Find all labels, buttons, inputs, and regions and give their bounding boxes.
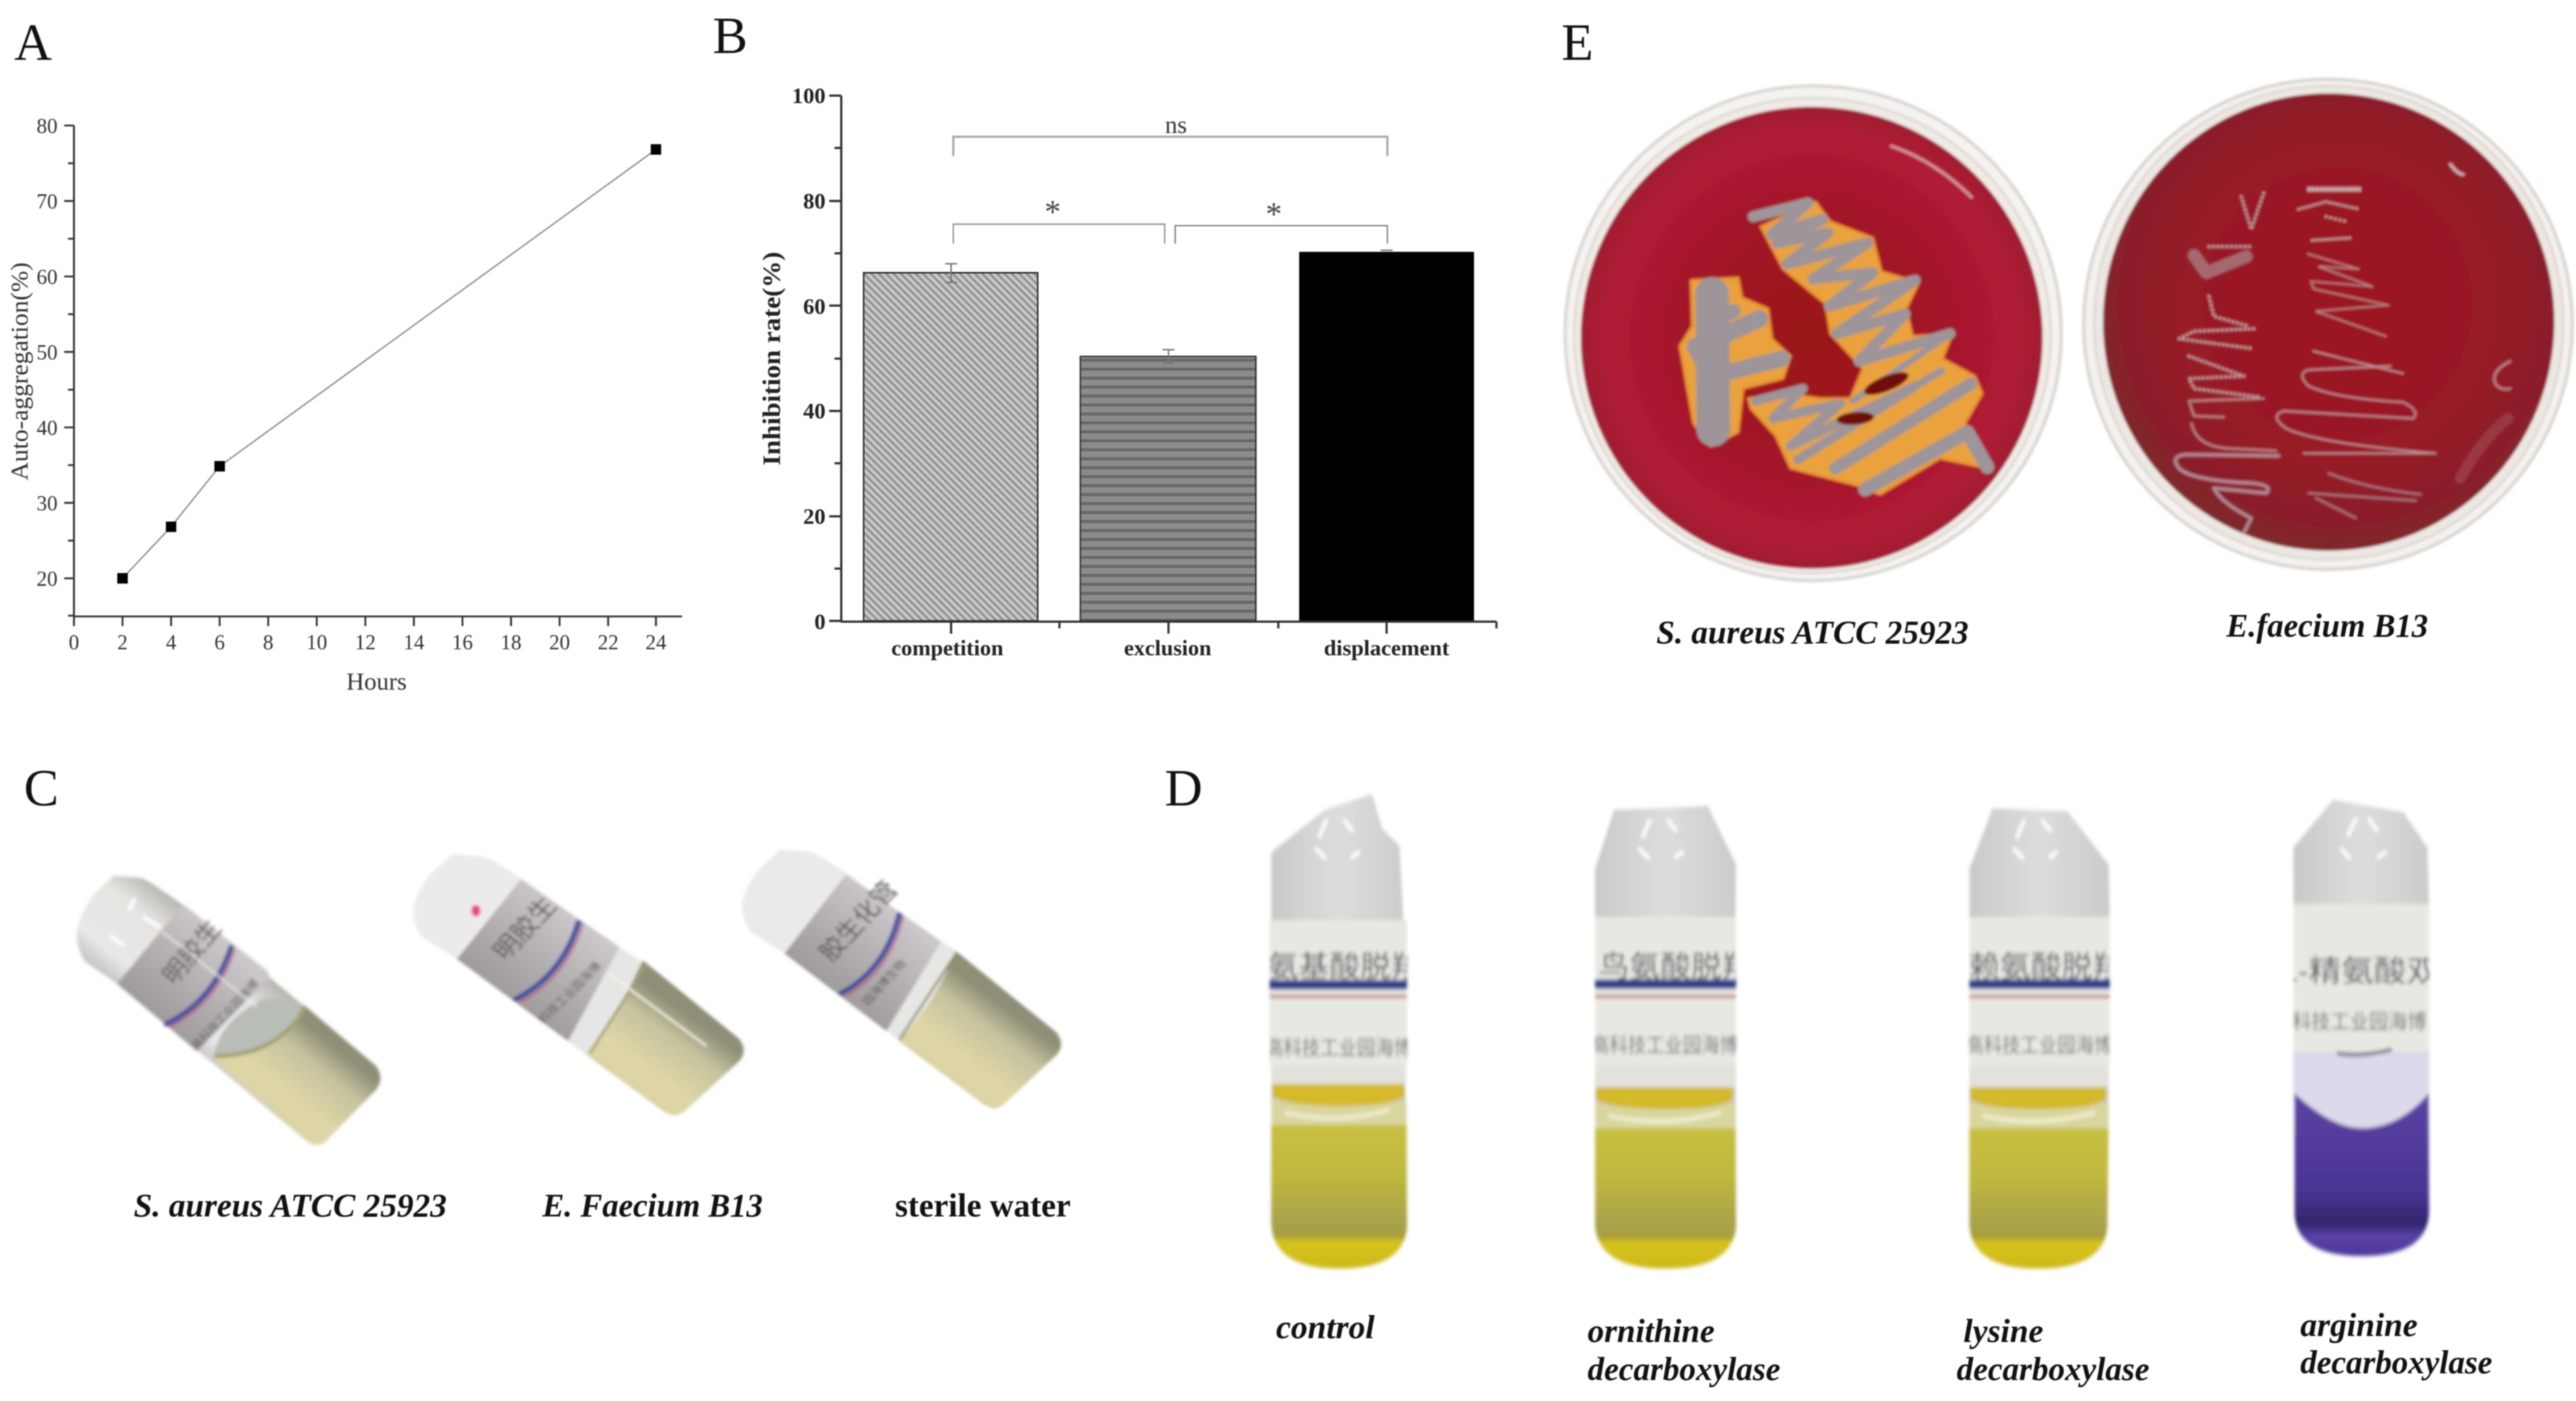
x tick labels: 4 xyxy=(166,631,176,655)
glass neck xyxy=(1272,1066,1406,1084)
y tick labels: 30 xyxy=(37,492,58,516)
meniscus xyxy=(1596,1087,1733,1110)
vial glass xyxy=(2294,800,2429,1256)
data line xyxy=(123,149,656,578)
y tick labels xyxy=(37,115,58,591)
panel letter A: A xyxy=(14,14,52,72)
liquid xyxy=(1272,1122,1407,1269)
dotted colonies left xyxy=(2179,193,2264,398)
label xyxy=(457,879,619,1041)
x axis title: Hours xyxy=(347,669,406,696)
x category labels xyxy=(891,636,1449,661)
label text small: 园海博生物 xyxy=(860,958,909,1008)
x tick labels: 10 xyxy=(306,631,327,655)
streak lines left xyxy=(2189,398,2276,451)
panel B: inhibition rate bar chart xyxy=(758,84,1496,661)
caption ornithine decarboxylase xyxy=(1588,1313,1780,1388)
significance bracket competition-exclusion xyxy=(953,224,1165,244)
streak lines right xyxy=(2276,366,2436,454)
error bars xyxy=(945,250,1393,363)
x tick labels: 18 xyxy=(501,631,521,655)
x tick labels: 14 xyxy=(403,631,424,655)
label text large: 鸟氨酸脱羧 xyxy=(1599,950,1753,983)
glass neck xyxy=(1595,1066,1736,1087)
y tick labels: 60 xyxy=(37,266,58,289)
band xyxy=(514,921,579,1000)
plate rim xyxy=(2084,79,2572,569)
white band xyxy=(568,947,641,1056)
label xyxy=(117,904,270,1051)
label text small: 高科技工业园海博 xyxy=(190,977,261,1053)
vial body and cap xyxy=(742,850,1061,1108)
y tick labels: 20 xyxy=(803,504,826,529)
caption sterile water: sterile water xyxy=(895,1187,1071,1224)
panel E: blood agar plate E. faecium xyxy=(2084,79,2572,569)
large colony patch left xyxy=(2194,256,2247,273)
agar xyxy=(2103,93,2554,551)
x tick labels: 2 xyxy=(117,631,128,655)
panel D: vial control xyxy=(1265,794,1422,1269)
highlights xyxy=(2342,819,2385,858)
purple liquid xyxy=(2294,1094,2429,1256)
label band xyxy=(1969,980,2110,989)
y tick labels: 80 xyxy=(803,189,826,214)
label text small: 高科技工业园海博 xyxy=(1966,1034,2112,1057)
label band xyxy=(1269,980,1407,989)
vial glass xyxy=(1969,808,2110,1269)
y axis title: Inhibition rate(%) xyxy=(758,252,786,466)
label xyxy=(784,874,941,1031)
x axis and ticks xyxy=(74,616,682,626)
x category labels: competition xyxy=(891,636,1003,661)
y tick labels xyxy=(792,84,826,634)
significance bracket ns xyxy=(953,137,1387,156)
y axis title: Auto-aggregation(%) xyxy=(7,262,34,480)
panel letter B: B xyxy=(713,7,748,65)
caption ornithine decarboxylase: ornithine xyxy=(1588,1313,1715,1349)
label xyxy=(2294,904,2429,1051)
caption ornithine decarboxylase: decarboxylase xyxy=(1588,1351,1780,1388)
label text large: 明胶生 xyxy=(488,892,563,965)
x axis xyxy=(841,622,1496,634)
x tick labels: 6 xyxy=(214,631,225,655)
x tick labels: 0 xyxy=(69,631,79,655)
label band xyxy=(1595,980,1736,989)
caption lysine decarboxylase: lysine xyxy=(1963,1313,2043,1349)
panel letter D: D xyxy=(1165,760,1203,817)
meniscus xyxy=(1970,1087,2106,1110)
vial glass xyxy=(1272,794,1407,1269)
dotted colonies right xyxy=(2299,189,2403,374)
y tick labels: 50 xyxy=(37,341,58,365)
panel D: vial ornithine xyxy=(1591,806,1753,1269)
meniscus line xyxy=(900,952,957,1039)
label text small: 高科技工业园海博 xyxy=(1265,1037,1412,1060)
y tick labels: 0 xyxy=(814,610,826,634)
bar displacement xyxy=(1299,252,1474,621)
panel D: vial arginine xyxy=(2291,798,2433,1260)
x tick labels xyxy=(69,631,666,655)
label text large: 赖氨酸脱羧 xyxy=(1969,950,2123,983)
y tick labels: 70 xyxy=(37,191,58,214)
y tick labels: 20 xyxy=(37,568,58,591)
agar xyxy=(1581,107,2043,569)
panel C: gelatin vial sterile water xyxy=(742,850,1061,1108)
pink mark xyxy=(471,905,480,917)
label text small: 科技工业园海博 xyxy=(536,960,604,1026)
x tick labels: 12 xyxy=(355,631,376,655)
white band xyxy=(886,941,957,1041)
x tick labels: 22 xyxy=(598,631,619,655)
plate rim xyxy=(1565,86,2061,581)
grey colony left blob xyxy=(1694,294,1782,430)
caption control: control xyxy=(1276,1309,1375,1346)
band xyxy=(164,945,232,1025)
y axis xyxy=(829,96,841,622)
y tick labels: 80 xyxy=(37,115,58,138)
x tick labels: 16 xyxy=(452,631,473,655)
label text small: 高科技工业园海博 xyxy=(1591,1034,1738,1057)
star right: * xyxy=(1266,196,1282,232)
orange pigment zone left xyxy=(1679,278,1791,446)
caption arginine decarboxylase xyxy=(2300,1307,2492,1381)
orange pigment zone upper xyxy=(1748,202,1987,495)
label text large: 胶生化管 xyxy=(814,876,903,967)
caption arginine decarboxylase: arginine xyxy=(2300,1307,2418,1343)
panel letter C: C xyxy=(24,760,59,817)
y axis and ticks xyxy=(64,126,74,616)
vial glass xyxy=(1595,806,1736,1269)
highlights xyxy=(1640,821,1682,858)
medium xyxy=(586,960,743,1116)
medium xyxy=(898,951,1061,1108)
clear holes xyxy=(1862,368,1911,399)
panel D: vial lysine xyxy=(1966,808,2123,1269)
bar exclusion xyxy=(1080,356,1256,621)
panel C: gelatin vial S. aureus xyxy=(77,876,380,1145)
rim highlight xyxy=(1890,146,1972,198)
plate edge marks xyxy=(2495,361,2510,389)
panel C: gelatin vial E. faecium xyxy=(413,854,743,1116)
vial body and cap xyxy=(77,876,380,1145)
label xyxy=(1969,917,2110,1066)
x tick labels: 20 xyxy=(549,631,570,655)
label text small: 科技工业园海博 xyxy=(2292,1011,2427,1034)
y tick labels: 40 xyxy=(803,399,826,424)
highlights xyxy=(111,899,159,945)
data markers xyxy=(117,144,661,584)
meniscus line xyxy=(589,964,647,1053)
label xyxy=(1595,917,1736,1066)
label ns: ns xyxy=(1165,112,1187,139)
caption S. aureus ATCC 25923 (vial): S. aureus ATCC 25923 xyxy=(134,1187,447,1224)
significance bracket exclusion-displacement xyxy=(1175,226,1387,244)
highlights xyxy=(2014,821,2056,858)
glass neck xyxy=(1969,1066,2109,1087)
y tick labels: 100 xyxy=(792,84,826,108)
x tick labels: 24 xyxy=(645,631,666,655)
x category labels: exclusion xyxy=(1124,636,1212,661)
y tick labels: 40 xyxy=(37,417,58,440)
label text large: 氨基酸脱羧 xyxy=(1268,950,1422,983)
panel E: blood agar plate S. aureus xyxy=(1565,86,2061,581)
caption E. Faecium B13 (vial): E. Faecium B13 xyxy=(542,1187,763,1224)
label xyxy=(1269,920,1407,1066)
vial body and cap xyxy=(413,854,743,1116)
meniscus xyxy=(1272,1084,1405,1106)
highlights xyxy=(1316,821,1358,858)
liquid xyxy=(1969,1125,2108,1269)
caption E.faecium B13 (plate): E.faecium B13 xyxy=(2226,607,2428,644)
x tick labels: 8 xyxy=(263,631,273,655)
x category labels: displacement xyxy=(1324,636,1449,661)
liquid xyxy=(1595,1125,1736,1269)
band xyxy=(840,913,900,994)
grey colony tail xyxy=(1866,432,1987,489)
star left: * xyxy=(1044,194,1061,230)
panel letter E: E xyxy=(1561,14,1594,72)
pale liquid band xyxy=(2294,1051,2429,1134)
y tick labels: 60 xyxy=(803,294,826,319)
grey colony upper zigzag xyxy=(1753,203,1971,468)
bar competition xyxy=(864,273,1038,621)
caption lysine decarboxylase xyxy=(1957,1313,2149,1388)
caption lysine decarboxylase: decarboxylase xyxy=(1957,1351,2149,1388)
label text large: 明胶生 xyxy=(158,915,227,990)
caption S. aureus ATCC 25923 (plate): S. aureus ATCC 25923 xyxy=(1656,614,1969,651)
panel A: auto-aggregation line chart xyxy=(7,115,682,696)
label text large: L-精氨酸双 xyxy=(2279,954,2439,989)
air bubble xyxy=(214,998,301,1057)
medium xyxy=(211,1005,380,1145)
meniscus xyxy=(214,1006,304,1056)
caption arginine decarboxylase: decarboxylase xyxy=(2300,1344,2492,1381)
